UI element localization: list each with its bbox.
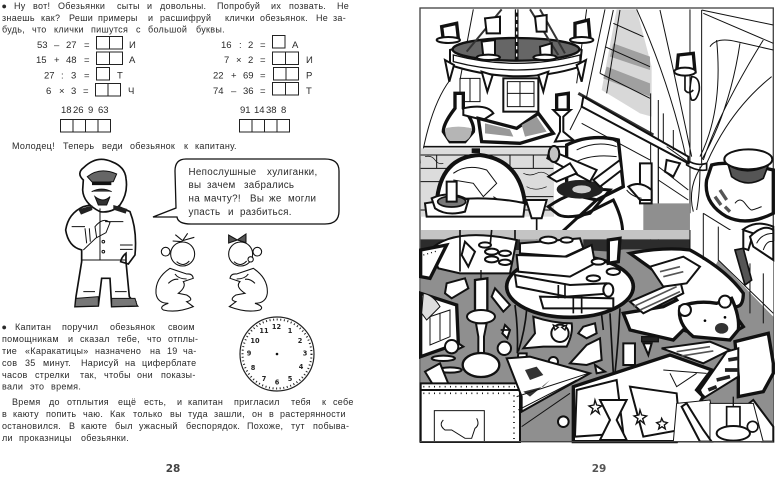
clock face: 8 (251, 364, 256, 372)
speech bubble: вы (188, 180, 201, 191)
closing paragraph: ещё (118, 397, 136, 407)
illustration: lower half of the cabin (420, 228, 773, 442)
monkey left (156, 233, 195, 311)
closing paragraph: в (269, 409, 274, 419)
right equations: 36 (243, 86, 254, 97)
speech bubble: забрались (244, 180, 294, 191)
clock paragraph: стрелки (35, 370, 70, 380)
intro paragraph: клички (225, 13, 255, 23)
folding chair and telescope (547, 138, 623, 250)
right equations: – (231, 86, 237, 97)
illustration: monkeys (156, 233, 267, 311)
riveted trunk (421, 383, 520, 442)
monkey right (229, 234, 267, 311)
speech bubble (153, 159, 339, 224)
clock paragraph: Капитан (15, 322, 51, 332)
left equations: А (129, 55, 136, 66)
intro paragraph: Попробуй (217, 1, 260, 11)
clock face: 6 (275, 378, 280, 386)
clock paragraph: назначено (95, 346, 141, 356)
clock paragraph: обезьянок (110, 322, 155, 332)
intro paragraph: пишутся (91, 24, 128, 34)
small round table with plates (430, 230, 517, 273)
closing paragraph: остановился. (2, 421, 61, 431)
instruction line: капитану. (195, 141, 237, 151)
speech bubble: могли (288, 194, 316, 204)
right equations: 22 (213, 70, 224, 82)
clock paragraph: часов (2, 370, 28, 380)
instruction line: Молодец! (12, 141, 55, 151)
bear-skin rug (623, 249, 743, 363)
tall candlestick in tray (445, 270, 510, 377)
brick wall (421, 148, 554, 217)
closing paragraph: попить (46, 409, 76, 419)
shelf with bottle and open book (423, 93, 577, 147)
chandelier (437, 9, 593, 92)
closing paragraph: он (252, 409, 263, 419)
clock paragraph: помощникам (2, 334, 59, 344)
closing paragraph: каюте (81, 421, 107, 431)
clock face (240, 317, 314, 391)
clock paragraph: сов (2, 358, 17, 368)
intro paragraph: ● (2, 1, 7, 11)
riveted panel left (421, 245, 447, 278)
intro paragraph: за- (333, 13, 346, 23)
intro paragraph: и (148, 13, 153, 23)
right equations: = (260, 55, 266, 66)
clock paragraph: 19 (167, 346, 178, 356)
clock face: 2 (298, 337, 303, 345)
closing paragraph: Похоже, (247, 421, 283, 431)
right equations: Т (306, 86, 312, 97)
closing paragraph: только (133, 409, 163, 419)
right equations: А (292, 40, 299, 51)
illustration: captain (66, 159, 137, 307)
curtains (421, 9, 773, 240)
instruction line: Теперь (63, 141, 94, 151)
closing paragraph: побыва- (313, 421, 349, 431)
illustration: cluttered captain's cabin (420, 8, 773, 442)
closing paragraph: к (322, 397, 326, 407)
intro paragraph: Ну (14, 1, 26, 11)
right equations: + (231, 70, 237, 82)
candlestick on shelf (553, 93, 573, 142)
boot and striped sock (700, 333, 773, 398)
left equations: 6 (46, 86, 51, 97)
closing paragraph: обезьянки. (81, 433, 129, 443)
clock face: 12 (272, 323, 281, 331)
page blank below illustration (420, 444, 774, 462)
clock face: 5 (288, 375, 293, 383)
left equations: + (54, 55, 60, 66)
intro paragraph: большой (148, 24, 187, 34)
clock paragraph: ча- (183, 346, 197, 356)
open star-pattern case (573, 355, 712, 442)
closing paragraph: был (115, 421, 133, 431)
clock paragraph: минут. (43, 358, 71, 368)
closing paragraph: чаю. (83, 409, 103, 419)
right shelves with cargo (582, 97, 690, 238)
right equations: Р (306, 70, 312, 82)
page number 28: 28 (166, 463, 180, 475)
intro paragraph: и (147, 1, 152, 11)
clock paragraph: поручил (62, 322, 98, 332)
lower-right barrel (703, 213, 773, 257)
clock face: 10 (250, 337, 260, 345)
closing paragraph: ли (2, 433, 13, 443)
closing paragraph: каюту (13, 409, 39, 419)
closing paragraph: себе (333, 397, 354, 407)
intro paragraph: что (32, 24, 47, 34)
speech bubble: хулиганки, (267, 167, 317, 178)
left equations: 3 (71, 86, 76, 97)
wine glass (526, 200, 547, 240)
closing paragraph: беспорядок. (186, 421, 240, 431)
clock face: 4 (299, 363, 304, 371)
intro paragraph: примеры (98, 13, 138, 23)
clock paragraph: сказал (80, 334, 110, 344)
closing paragraph: и (177, 397, 182, 407)
clock paragraph: циферблате (142, 358, 196, 368)
closing paragraph (2, 397, 354, 443)
clock paragraph: ● (2, 322, 7, 332)
intro paragraph: будь, (2, 24, 25, 34)
closing paragraph: пригласил (234, 397, 280, 407)
intro paragraph: довольны. (160, 1, 206, 11)
speech bubble: зачем (207, 180, 236, 191)
closing paragraph: растерянности (280, 409, 346, 419)
intro paragraph: Не (316, 13, 328, 23)
window (460, 78, 538, 112)
clock paragraph: так, (80, 370, 97, 380)
left equations: : (61, 70, 64, 82)
clock paragraph: тебе, (117, 334, 140, 344)
speech bubble: Вы (250, 194, 264, 204)
clock paragraph: Нарисуй (81, 358, 119, 368)
answer grid: first monkey name (60, 105, 110, 132)
clock face: 7 (262, 375, 267, 383)
clock paragraph: на (125, 358, 136, 368)
answer grid: second monkey name: 14 (254, 105, 265, 116)
right equations: × (236, 55, 242, 66)
chessboard box (507, 357, 590, 427)
clock paragraph: что (147, 334, 162, 344)
intro paragraph: позвать. (289, 1, 326, 11)
closing paragraph: зашли, (214, 409, 245, 419)
answer grid: first monkey name: 26 (73, 105, 84, 116)
right equations: 69 (243, 70, 254, 82)
left equations: = (83, 86, 89, 97)
clock face: 3 (303, 350, 308, 358)
clock paragraph: 35 (25, 358, 36, 368)
left equations: = (84, 70, 90, 82)
clock paragraph: тие (2, 346, 17, 356)
intro paragraph: обезьянок. (260, 13, 308, 23)
intro paragraph: буквы. (196, 24, 225, 34)
clock paragraph: отплы- (168, 334, 198, 344)
intro paragraph: Реши (69, 13, 93, 23)
clock paragraph: на (150, 346, 161, 356)
closing paragraph: В (69, 421, 75, 431)
left equations (36, 36, 136, 97)
speech bubble: же (269, 194, 282, 204)
clock paragraph: показы- (161, 370, 196, 380)
intro paragraph: знаешь (2, 13, 35, 23)
clock paragraph: они (137, 370, 153, 380)
globe on stand (425, 151, 525, 217)
cat under table (523, 317, 572, 348)
page number 29: 29 (592, 463, 606, 475)
wall candle sconce (674, 53, 699, 100)
left equations: И (129, 40, 136, 51)
answer grid: first monkey name: 63 (98, 105, 109, 116)
clock paragraph: это (30, 382, 44, 392)
instruction line: к (184, 141, 188, 151)
closing paragraph: в (2, 409, 7, 419)
intro paragraph: с (136, 24, 141, 34)
closing paragraph: Время (12, 397, 41, 407)
closing paragraph: есть, (144, 397, 166, 407)
left equations: Ч (128, 86, 134, 97)
paint brush and right shelves (690, 228, 773, 323)
speech bubble: упасть (188, 207, 220, 218)
chess pieces and slipper (443, 323, 658, 382)
right equations: : (239, 40, 242, 51)
right equations: = (260, 70, 266, 82)
clock paragraph: время. (51, 382, 81, 392)
left equations: 53 (37, 40, 48, 51)
sail and rigging (578, 9, 653, 135)
intro paragraph: Обезьянки (58, 1, 105, 11)
intro paragraph (2, 1, 349, 34)
answer grid: second monkey name (240, 105, 290, 132)
right equations: 2 (248, 55, 253, 66)
closing paragraph: тут (291, 421, 305, 431)
answer grid: second monkey name: 8 (281, 105, 286, 116)
left equations: 3 (71, 70, 76, 82)
captain's cap on bag (706, 149, 773, 221)
right equations: = (260, 86, 266, 97)
left equations: Т (117, 70, 123, 82)
closing paragraph: тебя (291, 397, 311, 407)
left equations: 27 (44, 70, 55, 82)
intro paragraph: вот! (33, 1, 50, 11)
right equations: 7 (224, 55, 229, 66)
right equations (213, 36, 313, 97)
closing paragraph: проказницы (19, 433, 72, 443)
small candle on dish (673, 397, 773, 442)
right equations: И (306, 55, 313, 66)
left equations: 48 (66, 55, 77, 66)
right equations: 2 (248, 40, 253, 51)
closing paragraph: туда (188, 409, 208, 419)
speech bubble: Непослушные (188, 167, 257, 178)
speech bubble: разбиться. (240, 207, 292, 218)
answer grid: first monkey name: 18 (61, 105, 72, 116)
left equations: – (54, 40, 60, 51)
closing paragraph: вы (170, 409, 182, 419)
clock face: 1 (288, 327, 293, 335)
left equations: 15 (36, 55, 47, 66)
answer grid: second monkey name: 38 (266, 105, 277, 116)
left equations: × (59, 86, 65, 97)
left equations: 27 (66, 40, 77, 51)
closing paragraph: капитан (188, 397, 223, 407)
clock paragraph (2, 322, 198, 392)
treasure chest (421, 293, 462, 373)
closing paragraph: ужасный (139, 421, 178, 431)
clock paragraph: своим (168, 322, 195, 332)
intro paragraph: клички (54, 24, 84, 34)
left equations: = (84, 40, 90, 51)
clock face: 11 (259, 327, 269, 335)
clock paragraph: вали (2, 382, 23, 392)
answer grid: second monkey name: 91 (240, 105, 251, 116)
clock paragraph: и (68, 334, 73, 344)
floor (421, 230, 773, 442)
speech bubble: и (228, 207, 234, 218)
answer grid: first monkey name: 9 (88, 105, 93, 116)
left equations: = (84, 55, 90, 66)
closing paragraph: отплытия (67, 397, 109, 407)
right equations: 16 (221, 40, 232, 51)
intro paragraph: как? (41, 13, 60, 23)
right equations: = (260, 40, 266, 51)
speech bubble: на (188, 194, 200, 204)
closing paragraph: до (49, 397, 60, 407)
intro paragraph: расшифруй (160, 13, 211, 23)
right equations: 74 (213, 86, 224, 97)
intro paragraph: сыты (117, 1, 140, 11)
speech bubble: мачту?! (204, 194, 241, 204)
clock face: 9 (247, 350, 252, 358)
intro paragraph: их (271, 1, 281, 11)
intro paragraph: Не (337, 1, 349, 11)
instruction line: веди (102, 141, 123, 151)
paint tube (425, 363, 459, 410)
clock paragraph: «Каракатицы» (25, 346, 89, 356)
closing paragraph: Как (110, 409, 125, 419)
central round table with books and scrolls (507, 237, 633, 373)
instruction line: обезьянок (130, 141, 175, 151)
frame bottom edge (420, 440, 773, 444)
clock paragraph: чтобы (104, 370, 131, 380)
